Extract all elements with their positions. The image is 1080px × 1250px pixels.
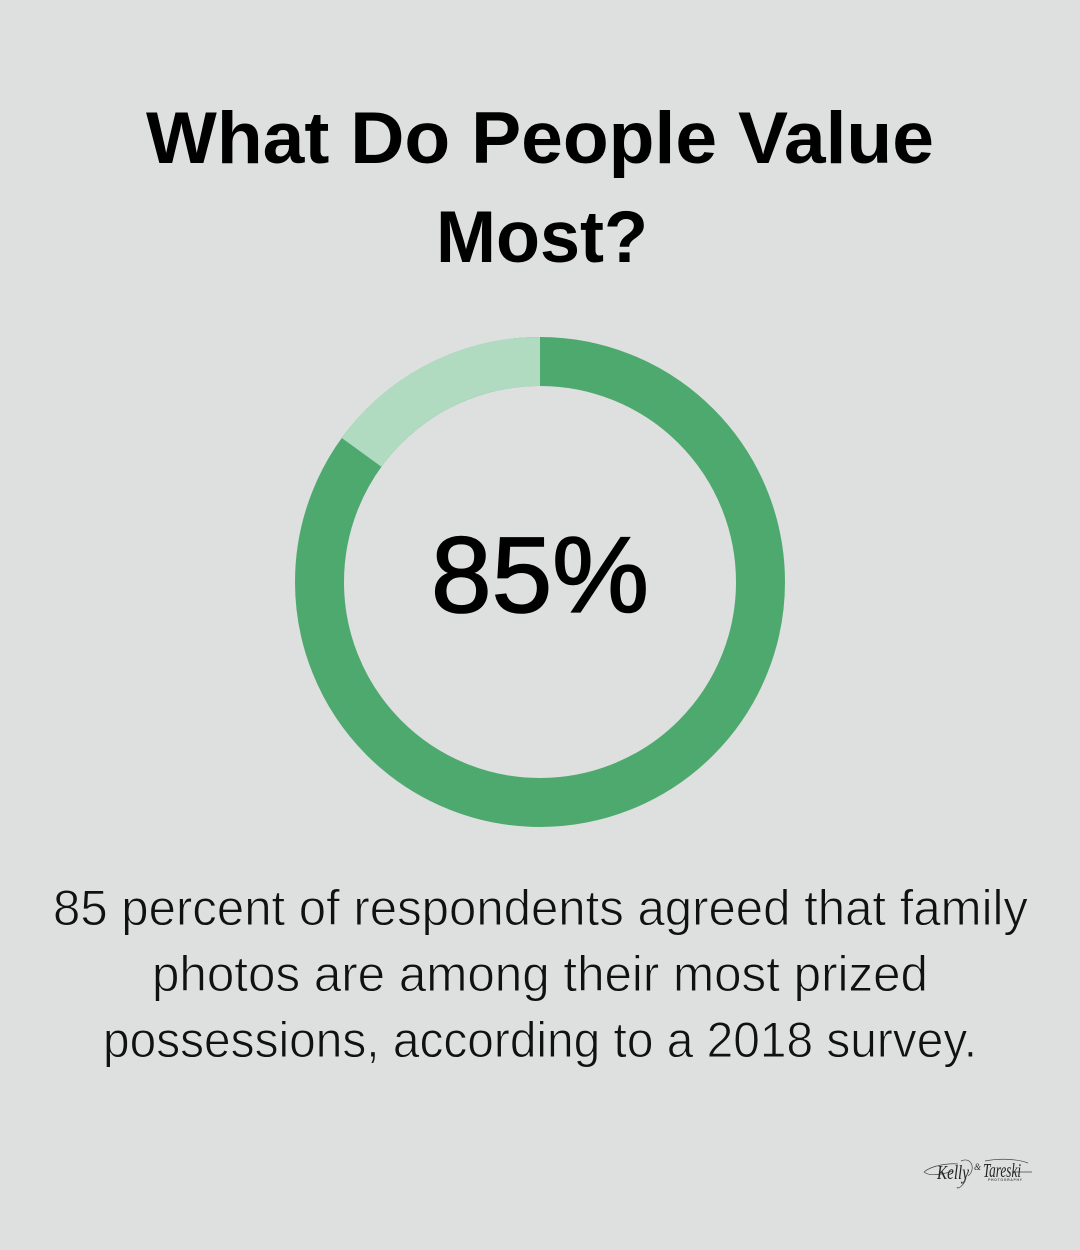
- logo: Kelly & Tareski Photography signature: [924, 1159, 1032, 1188]
- title: Most?: [436, 197, 648, 278]
- donut value: 85%: [431, 514, 649, 635]
- donut chart: 85 percent: [320, 362, 760, 802]
- description text: possessions, according to a 2018 survey.: [103, 1012, 977, 1068]
- description text: photos are among their most prized: [152, 946, 928, 1002]
- logo: Kelly & Tareski Photography signature: &: [974, 1162, 981, 1172]
- title: [146, 98, 934, 278]
- logo: Kelly & Tareski Photography signature: PHOTOGRAPHY: [988, 1178, 1023, 1182]
- description text: 85 percent of respondents agreed that family: [53, 880, 1028, 936]
- logo: Kelly & Tareski Photography signature: Kelly: [936, 1162, 969, 1184]
- description text: [53, 880, 1028, 1068]
- title: What Do People Value: [146, 98, 934, 179]
- logo: Kelly & Tareski Photography signature: Tareski: [983, 1160, 1021, 1182]
